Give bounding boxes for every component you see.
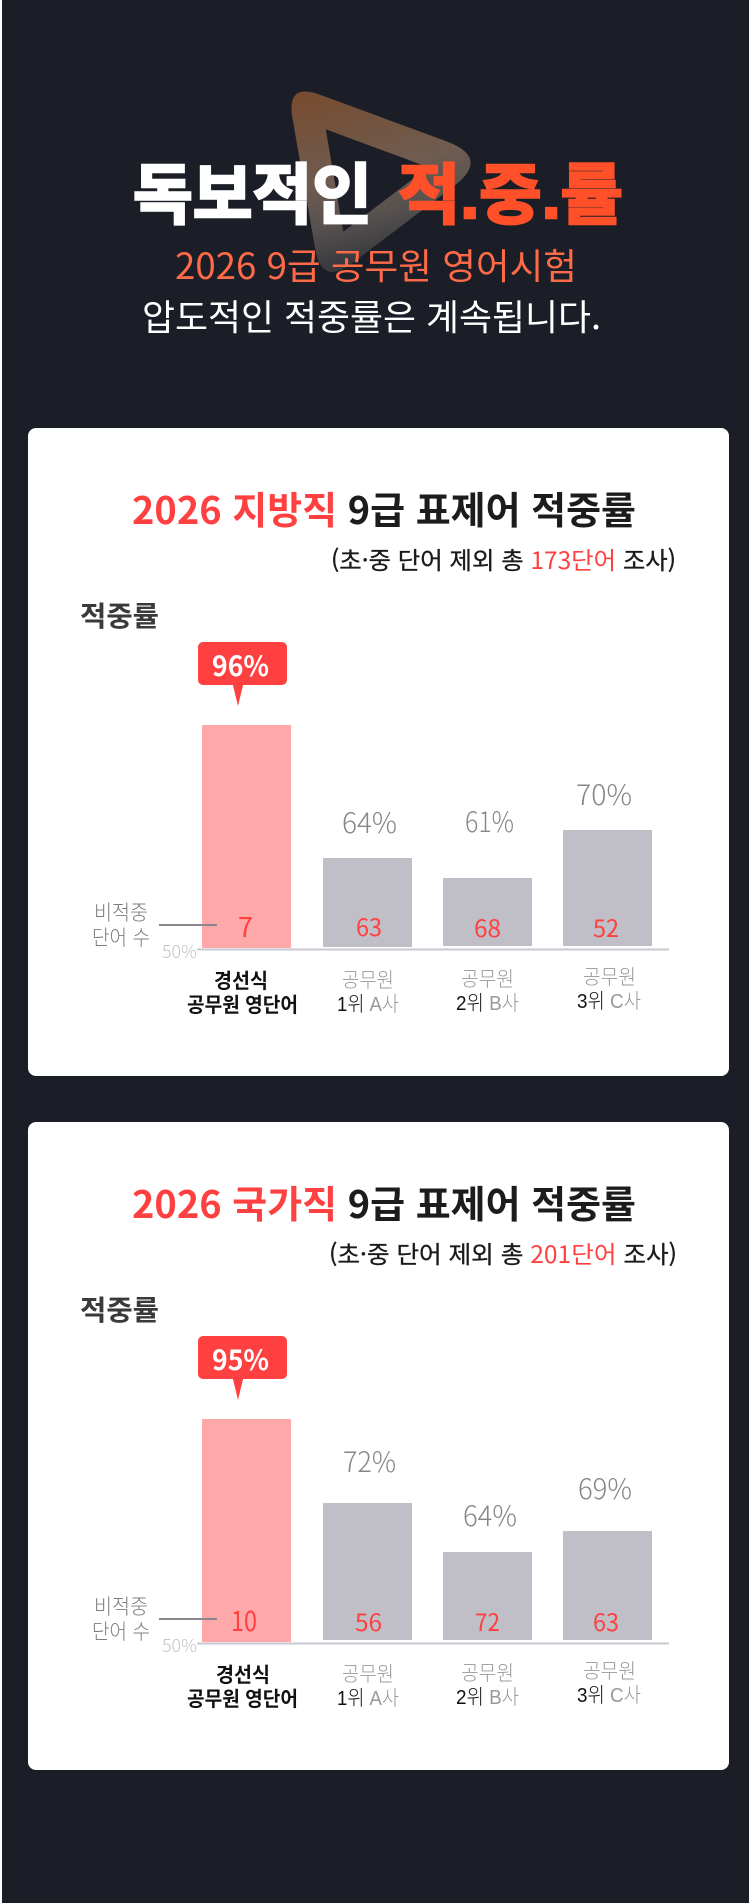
scope note: (초·중 단어 제외 총 201단어 조사): [329, 1235, 677, 1270]
subtitle line 2: 압도적인 적중률은 계속됩니다.: [142, 289, 601, 341]
bar chart: 64%: [463, 1495, 517, 1535]
bar chart: 52: [593, 909, 619, 944]
category labels: 공무원 영단어: [187, 1688, 298, 1711]
callout: 95%: [198, 1336, 287, 1400]
bar chart: 7: [238, 906, 253, 945]
callout: 96%: [198, 642, 287, 706]
category labels: 경선식: [216, 1664, 270, 1687]
title: 독보적인: [133, 158, 372, 232]
bar chart: 72%: [343, 1441, 396, 1481]
icon: play triangle: [291, 91, 471, 272]
bar chart: 64%: [342, 802, 397, 842]
bar chart: 63: [593, 1603, 619, 1638]
category labels: 공무원: [583, 1660, 636, 1683]
bar chart: 56: [355, 1603, 382, 1638]
category labels: 공무원: [461, 1662, 514, 1685]
bar chart: 70%: [576, 774, 632, 814]
bar chart: 비적중: [94, 897, 148, 927]
bar chart: 단어 수: [92, 1616, 150, 1646]
bar chart: 단어 수: [92, 922, 150, 952]
axis title: 적중률: [80, 595, 159, 635]
bar chart: 50%: [162, 1632, 197, 1658]
category labels: 1위 A사: [337, 993, 399, 1016]
category labels: 2위 B사: [456, 1686, 519, 1709]
category labels: 공무원: [342, 1663, 394, 1686]
title: 적.중.률: [398, 158, 623, 232]
bar chart: 10: [231, 1600, 257, 1639]
axis title: 적중률: [80, 1289, 159, 1329]
bar chart: 61%: [465, 801, 514, 841]
heading: 2026 지방직 9급 표제어 적중률: [132, 480, 636, 535]
bar chart: [92, 1419, 669, 1658]
subtitle line 1: 2026 9급 공무원 영어시험: [175, 238, 577, 290]
callout: 95%: 95%: [212, 1339, 269, 1379]
bar chart: [92, 725, 669, 964]
category labels: [187, 1660, 641, 1711]
category labels: 공무원: [583, 966, 636, 989]
category labels: 1위 A사: [337, 1687, 399, 1710]
category labels: 3위 C사: [577, 990, 641, 1013]
category labels: 공무원: [342, 969, 394, 992]
scope note: (초·중 단어 제외 총 173단어 조사): [331, 541, 676, 576]
bar chart: 50%: [162, 938, 197, 964]
title: [133, 158, 623, 232]
category labels: [187, 966, 641, 1017]
bar chart: 68: [474, 909, 501, 944]
category labels: 경선식: [214, 970, 268, 993]
bar chart: 비적중: [94, 1591, 148, 1621]
callout: 96%: 96%: [212, 645, 269, 685]
panel: 국가직: [28, 1122, 729, 1770]
bar chart: 72: [475, 1603, 500, 1638]
heading: 2026 국가직 9급 표제어 적중률: [132, 1174, 636, 1229]
category labels: 2위 B사: [456, 992, 519, 1015]
panel: 지방직: [28, 428, 729, 1076]
category labels: 공무원: [461, 968, 514, 991]
bar chart: 63: [356, 908, 382, 943]
category labels: 3위 C사: [577, 1684, 641, 1707]
category labels: 공무원 영단어: [187, 994, 298, 1017]
bar chart: 69%: [578, 1468, 632, 1508]
